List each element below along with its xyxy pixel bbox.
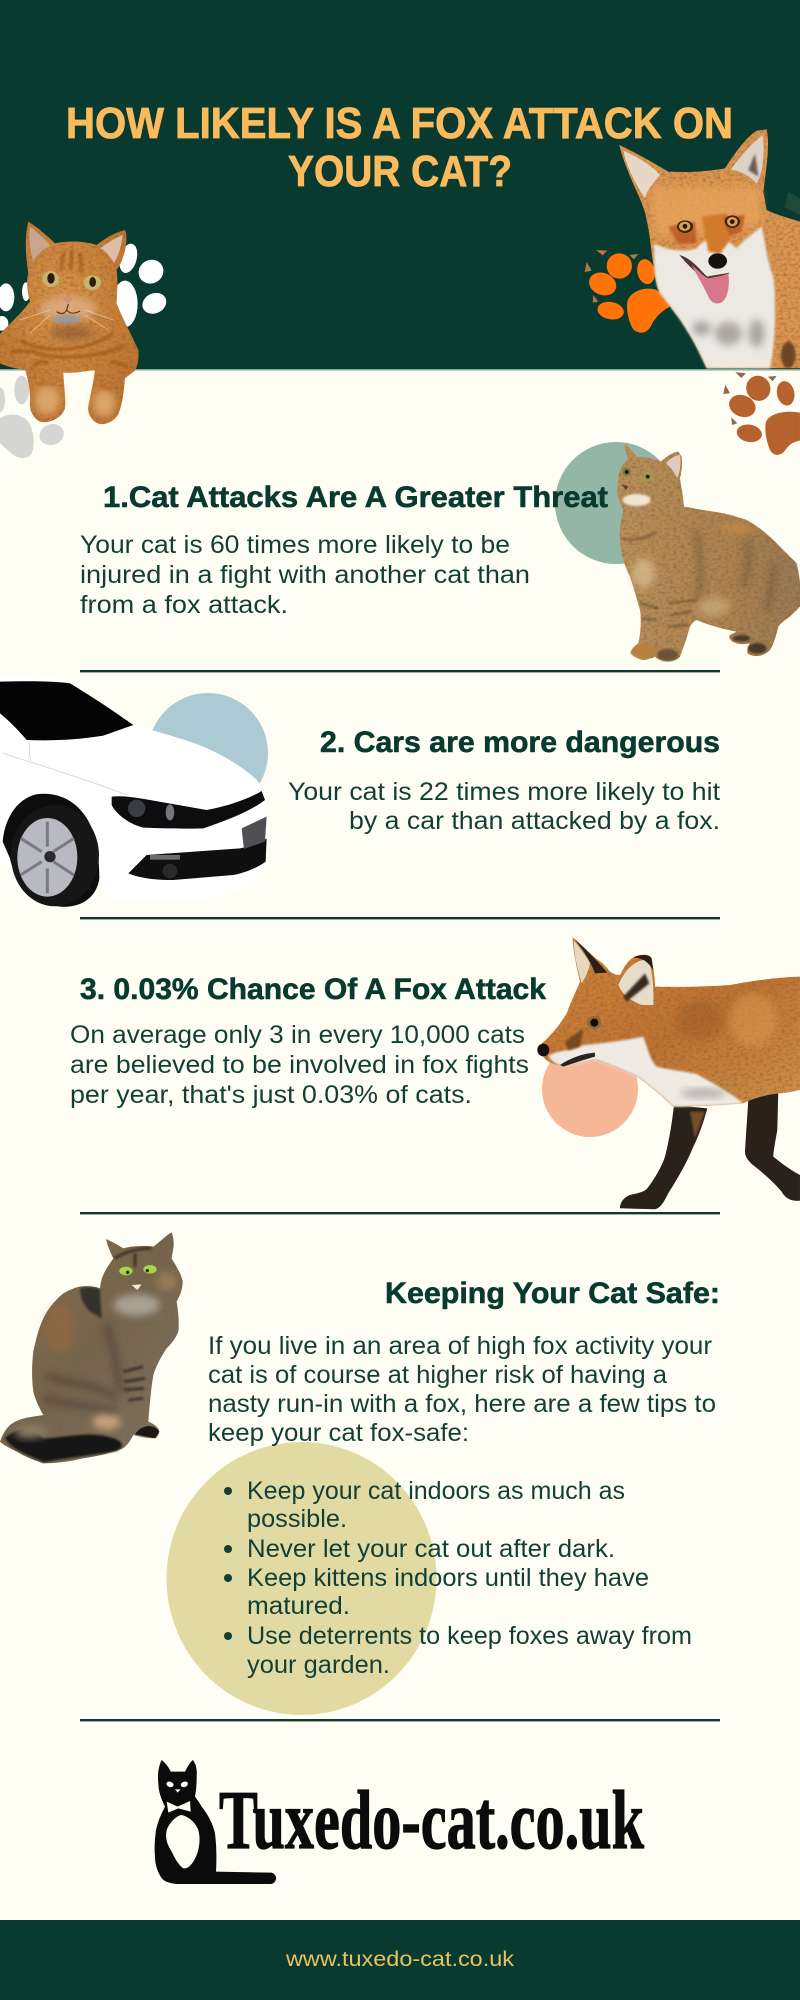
bullet list of tips: your garden. [247,1651,390,1679]
panel: point 3 fox chance [70,937,800,1209]
icon: long-haired tabby cat photo [0,1232,183,1463]
divider line 3 [80,1212,720,1214]
icon: orange paw print [585,249,670,333]
peach circle [542,1041,638,1137]
icon: grey paw print [0,376,67,458]
blue circle [148,693,268,813]
icon: fox portrait photo [619,129,800,368]
text: point 1 body: Your cat is 60 times more likely to be [80,531,510,559]
divider line 1 [80,670,720,672]
panel: footer band [0,1920,800,2000]
divider line 2 [80,917,720,919]
sage circle [555,442,677,564]
icon: orange cat photo [0,222,139,424]
bullet list of tips: matured. [247,1592,350,1620]
text: point 1 body: from a fox attack. [80,591,288,619]
text: point 3 body: On average only 3 in every 10,000 cats [70,1021,525,1049]
icon: white car photo [0,674,269,907]
bullet list of tips: Keep kittens indoors until they have [247,1564,649,1592]
bullet list of tips: Use deterrents to keep foxes away from [247,1622,692,1650]
icon: tabby cat photo [617,443,800,661]
heading: point 2: 2. Cars are more dangerous [320,726,720,759]
text: intro paragraph: cat is of course at higher risk of having a [208,1361,667,1389]
khaki circle [166,1442,436,1715]
text: point 2 body [288,778,720,835]
bullet list of tips: possible. [247,1505,347,1533]
text: point 3 body [70,1021,529,1109]
text: intro paragraph: keep your cat fox-safe: [208,1419,469,1447]
divider line 4 [80,1719,720,1721]
text: point 3 body: per year, that's just 0.03% of cats. [70,1081,472,1109]
icon: walking fox photo [537,937,800,1209]
panel: keeping your cat safe [0,1232,720,1715]
text: point 2 body: by a car than attacked by a fox. [349,807,720,835]
text: point 1 body: injured in a fight with another cat than [80,561,530,589]
text: intro paragraph: nasty run-in with a fox, here are a few tips to [208,1390,716,1418]
icon: tuxedo cat silhouette [155,1760,276,1884]
text: point 1 body [80,531,530,619]
text: intro paragraph [208,1332,716,1447]
heading: keeping your cat safe: Keeping Your Cat Safe: [385,1277,720,1310]
icon: white paw print [0,242,170,331]
logo: tuxedo cat [155,1760,644,1884]
panel: point 1 cat attacks [80,442,800,661]
title: HOW LIKELY IS A FOX ATTACK ON [66,99,733,148]
heading: point 1: 1.Cat Attacks Are A Greater Threat [103,481,608,514]
bullet list of tips: Keep your cat indoors as much as [247,1477,625,1505]
bullet list of tips [224,1477,692,1679]
bullet list of tips: Never let your cat out after dark. [247,1535,615,1563]
panel: point 2 cars [0,674,720,907]
footer url: www.tuxedo-cat.co.uk [285,1948,515,1971]
icon: brown paw print [723,372,800,455]
text: intro paragraph: If you live in an area of high fox activity your [208,1332,712,1360]
title: YOUR CAT? [288,147,512,196]
panel: header band [0,0,800,370]
text: point 2 body: Your cat is 22 times more likely to hit [288,778,720,806]
text: point 3 body: are believed to be involved in fox fights [70,1051,529,1079]
heading: point 3: 3. 0.03% Chance Of A Fox Attack [80,973,546,1006]
title [66,99,733,196]
